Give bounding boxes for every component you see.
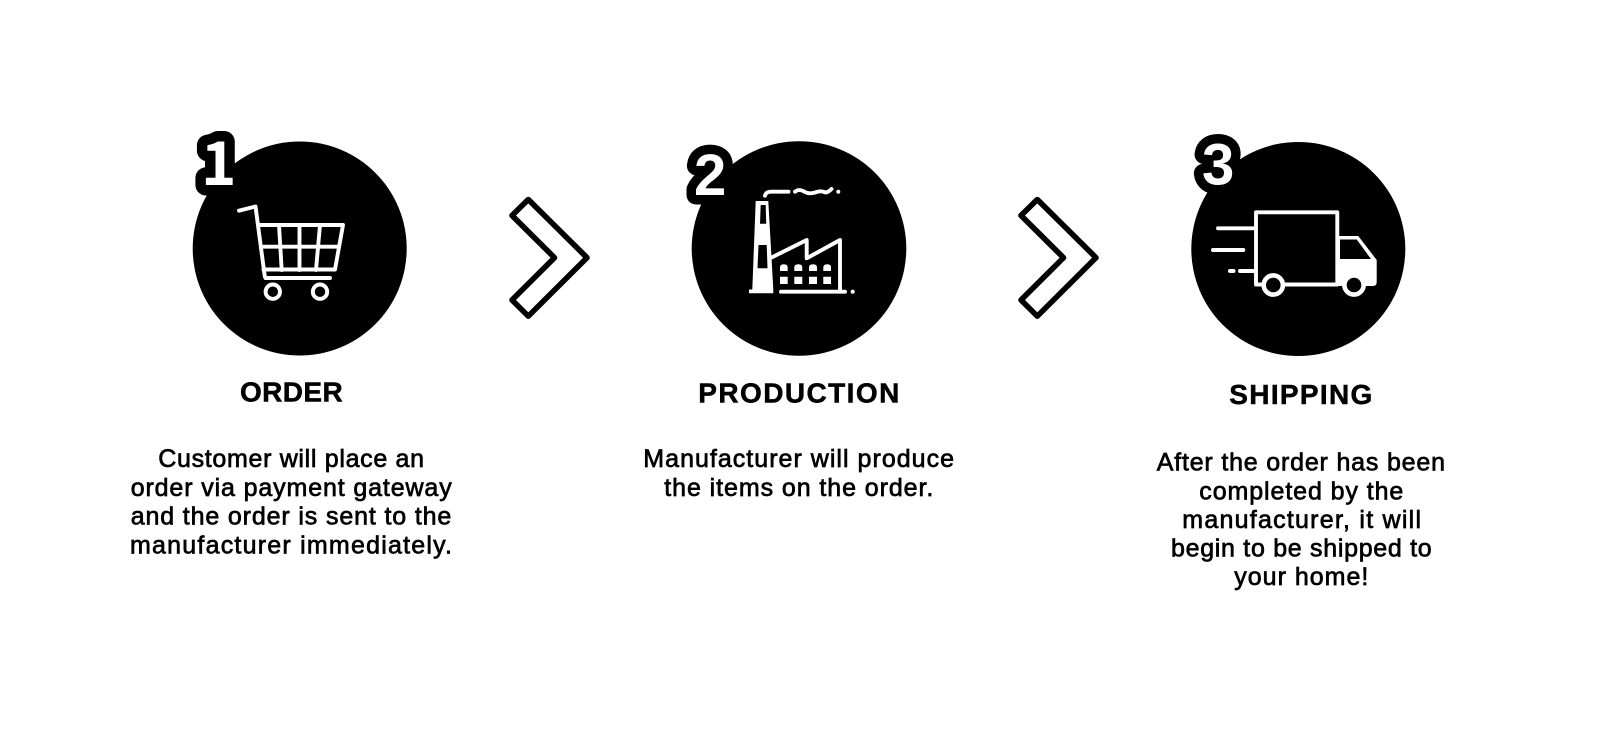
arrow: order to production	[512, 200, 587, 316]
panel: step 2 production	[643, 141, 954, 502]
circle: step 3	[1191, 142, 1405, 356]
number badge 2: 2	[694, 143, 726, 208]
text block: order description: and the order is sent to the	[131, 503, 451, 531]
text block: order description: manufacturer immediately.	[130, 531, 452, 559]
circle: step 2	[692, 141, 906, 356]
heading: order: ORDER	[240, 376, 343, 408]
text block: shipping description: After the order has been	[1157, 448, 1445, 476]
text block: shipping description: begin to be shipped to	[1171, 534, 1432, 562]
circle: step 1	[193, 142, 407, 356]
number badge 3: 3	[1202, 132, 1234, 198]
text block: production description	[643, 445, 954, 502]
arrow: production to shipping	[1021, 200, 1096, 316]
text block: order description: order via payment gateway	[131, 474, 452, 502]
text block: shipping description: your home!	[1234, 563, 1368, 591]
icon: delivery truck	[1213, 212, 1377, 295]
number badge 1: 1	[201, 116, 236, 203]
text block: order description	[130, 445, 452, 559]
text block: production description: Manufacturer will produce	[643, 445, 954, 473]
icon: factory	[749, 189, 855, 294]
text block: shipping description: manufacturer, it will	[1182, 506, 1421, 534]
text block: shipping description: completed by the	[1199, 477, 1403, 505]
panel: step 3 shipping	[1157, 132, 1445, 591]
text block: order description: Customer will place an	[158, 445, 424, 473]
heading: production: PRODUCTION	[698, 378, 899, 408]
text block: shipping description	[1157, 448, 1445, 591]
icon: shopping cart	[239, 206, 343, 299]
panel: step 1 order	[130, 116, 452, 559]
text block: production description: the items on the order.	[664, 474, 933, 502]
heading: shipping: SHIPPING	[1229, 379, 1372, 410]
